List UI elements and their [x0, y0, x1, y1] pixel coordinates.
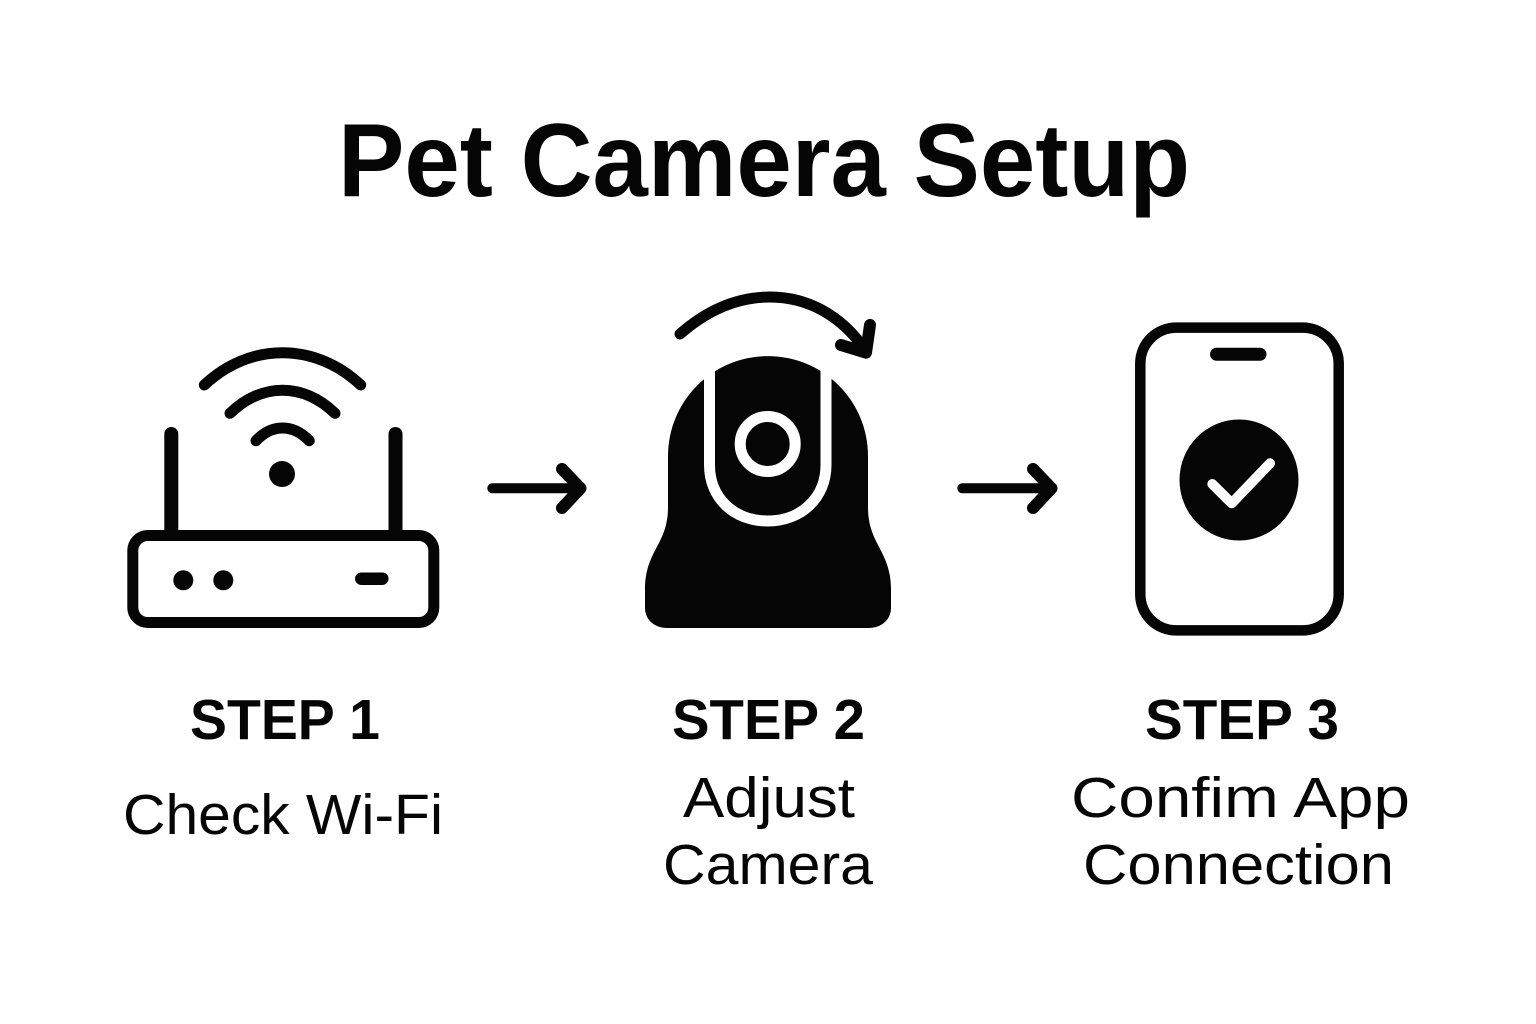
Wi-Fi signal arcs: [204, 353, 361, 441]
router status lights: [173, 570, 233, 590]
router body: [133, 536, 434, 622]
check mark: [1212, 463, 1270, 503]
camera body: [645, 356, 891, 628]
left antenna: [164, 434, 178, 532]
right antenna: [388, 434, 402, 532]
phone speaker: [1216, 348, 1260, 361]
arrow: step 2 to step 3: [962, 469, 1052, 508]
step 3 description: [1071, 766, 1410, 897]
step 3 description: Confim App: [1071, 766, 1410, 830]
icon: pan-tilt camera: [645, 297, 891, 628]
icon: smartphone with check: [1140, 328, 1339, 630]
Wi-Fi dot: [269, 461, 295, 487]
step 2 description: [663, 766, 873, 897]
title: Pet Camera Setup: [338, 103, 1190, 219]
step 2 description: Camera: [663, 833, 873, 897]
phone outline: [1140, 328, 1339, 630]
check badge: [1180, 420, 1298, 540]
arrow: step 1 to step 2: [492, 469, 580, 508]
step 1 description: Check Wi-Fi: [123, 783, 443, 847]
step 2 label: STEP 2: [672, 688, 865, 752]
icon: Wi-Fi router: [133, 353, 434, 622]
step 3 description: Connection: [1083, 833, 1394, 897]
router indicator bar: [361, 572, 382, 585]
camera head outline: [710, 368, 826, 521]
step 3 label: STEP 3: [1145, 688, 1339, 752]
step 2 description: Adjust: [683, 766, 855, 830]
camera lens ring: [740, 416, 795, 472]
step 1 label: STEP 1: [190, 688, 380, 752]
rotation arrow: [680, 297, 870, 353]
